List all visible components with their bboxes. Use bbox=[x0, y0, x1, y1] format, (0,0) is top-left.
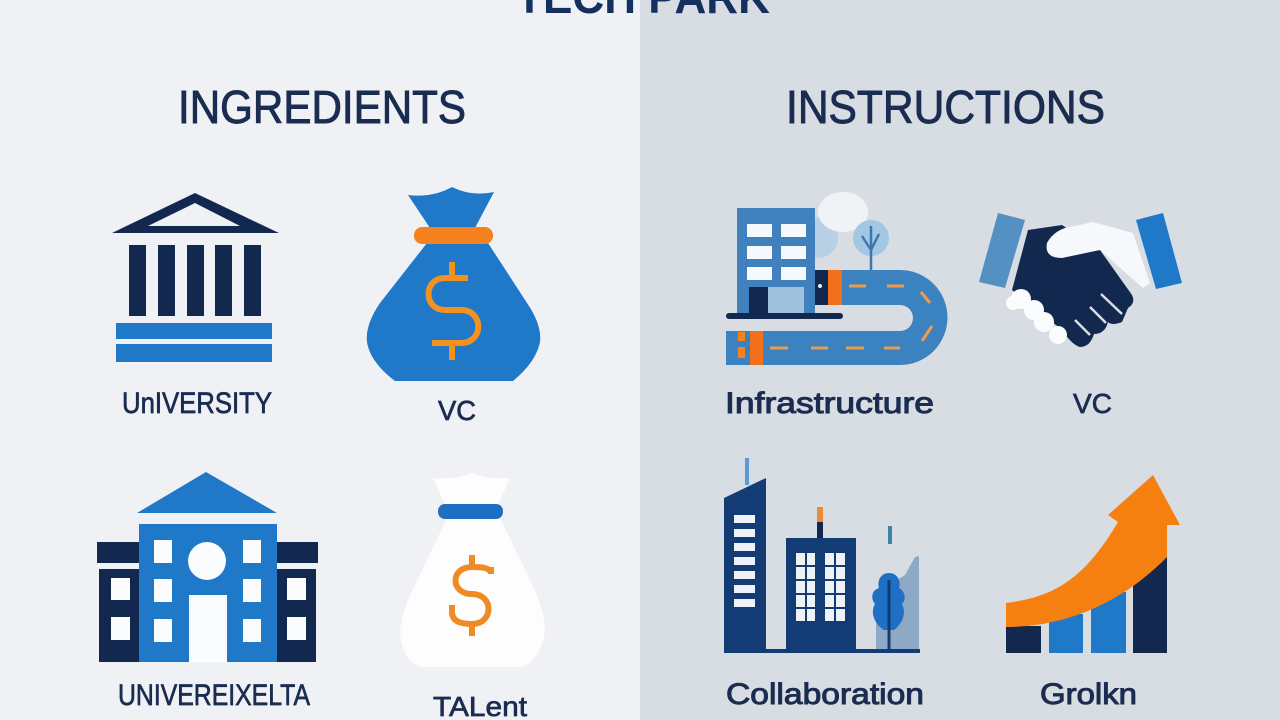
icon: money bag VC bbox=[367, 187, 540, 381]
label: VC right: VC bbox=[1073, 388, 1112, 419]
heading: instructions: INSTRUCTIONS bbox=[786, 81, 1105, 133]
panel: instructions background bbox=[640, 0, 1280, 720]
label: university garbled: UNIVEREIXELTA bbox=[118, 679, 310, 712]
icon: infrastructure building and road bbox=[726, 192, 948, 365]
label: growth garbled: Grolkn bbox=[1040, 678, 1137, 711]
icon: collaboration city skyline bbox=[724, 458, 920, 653]
label: collaboration: Collaboration bbox=[726, 678, 924, 711]
label: university: UnIVERSITY bbox=[122, 387, 272, 420]
label: infrastructure: Infrastructure bbox=[725, 387, 934, 420]
panel: ingredients background bbox=[0, 0, 640, 720]
icon: university columns bbox=[112, 193, 279, 362]
heading: ingredients: INGREDIENTS bbox=[178, 81, 466, 133]
chart: growth bars and arrow bbox=[1006, 475, 1180, 653]
label: VC left: VC bbox=[438, 395, 476, 426]
icon: university building bbox=[97, 472, 318, 662]
icon: white money bag bbox=[400, 473, 545, 667]
icon: handshake bbox=[979, 213, 1182, 347]
